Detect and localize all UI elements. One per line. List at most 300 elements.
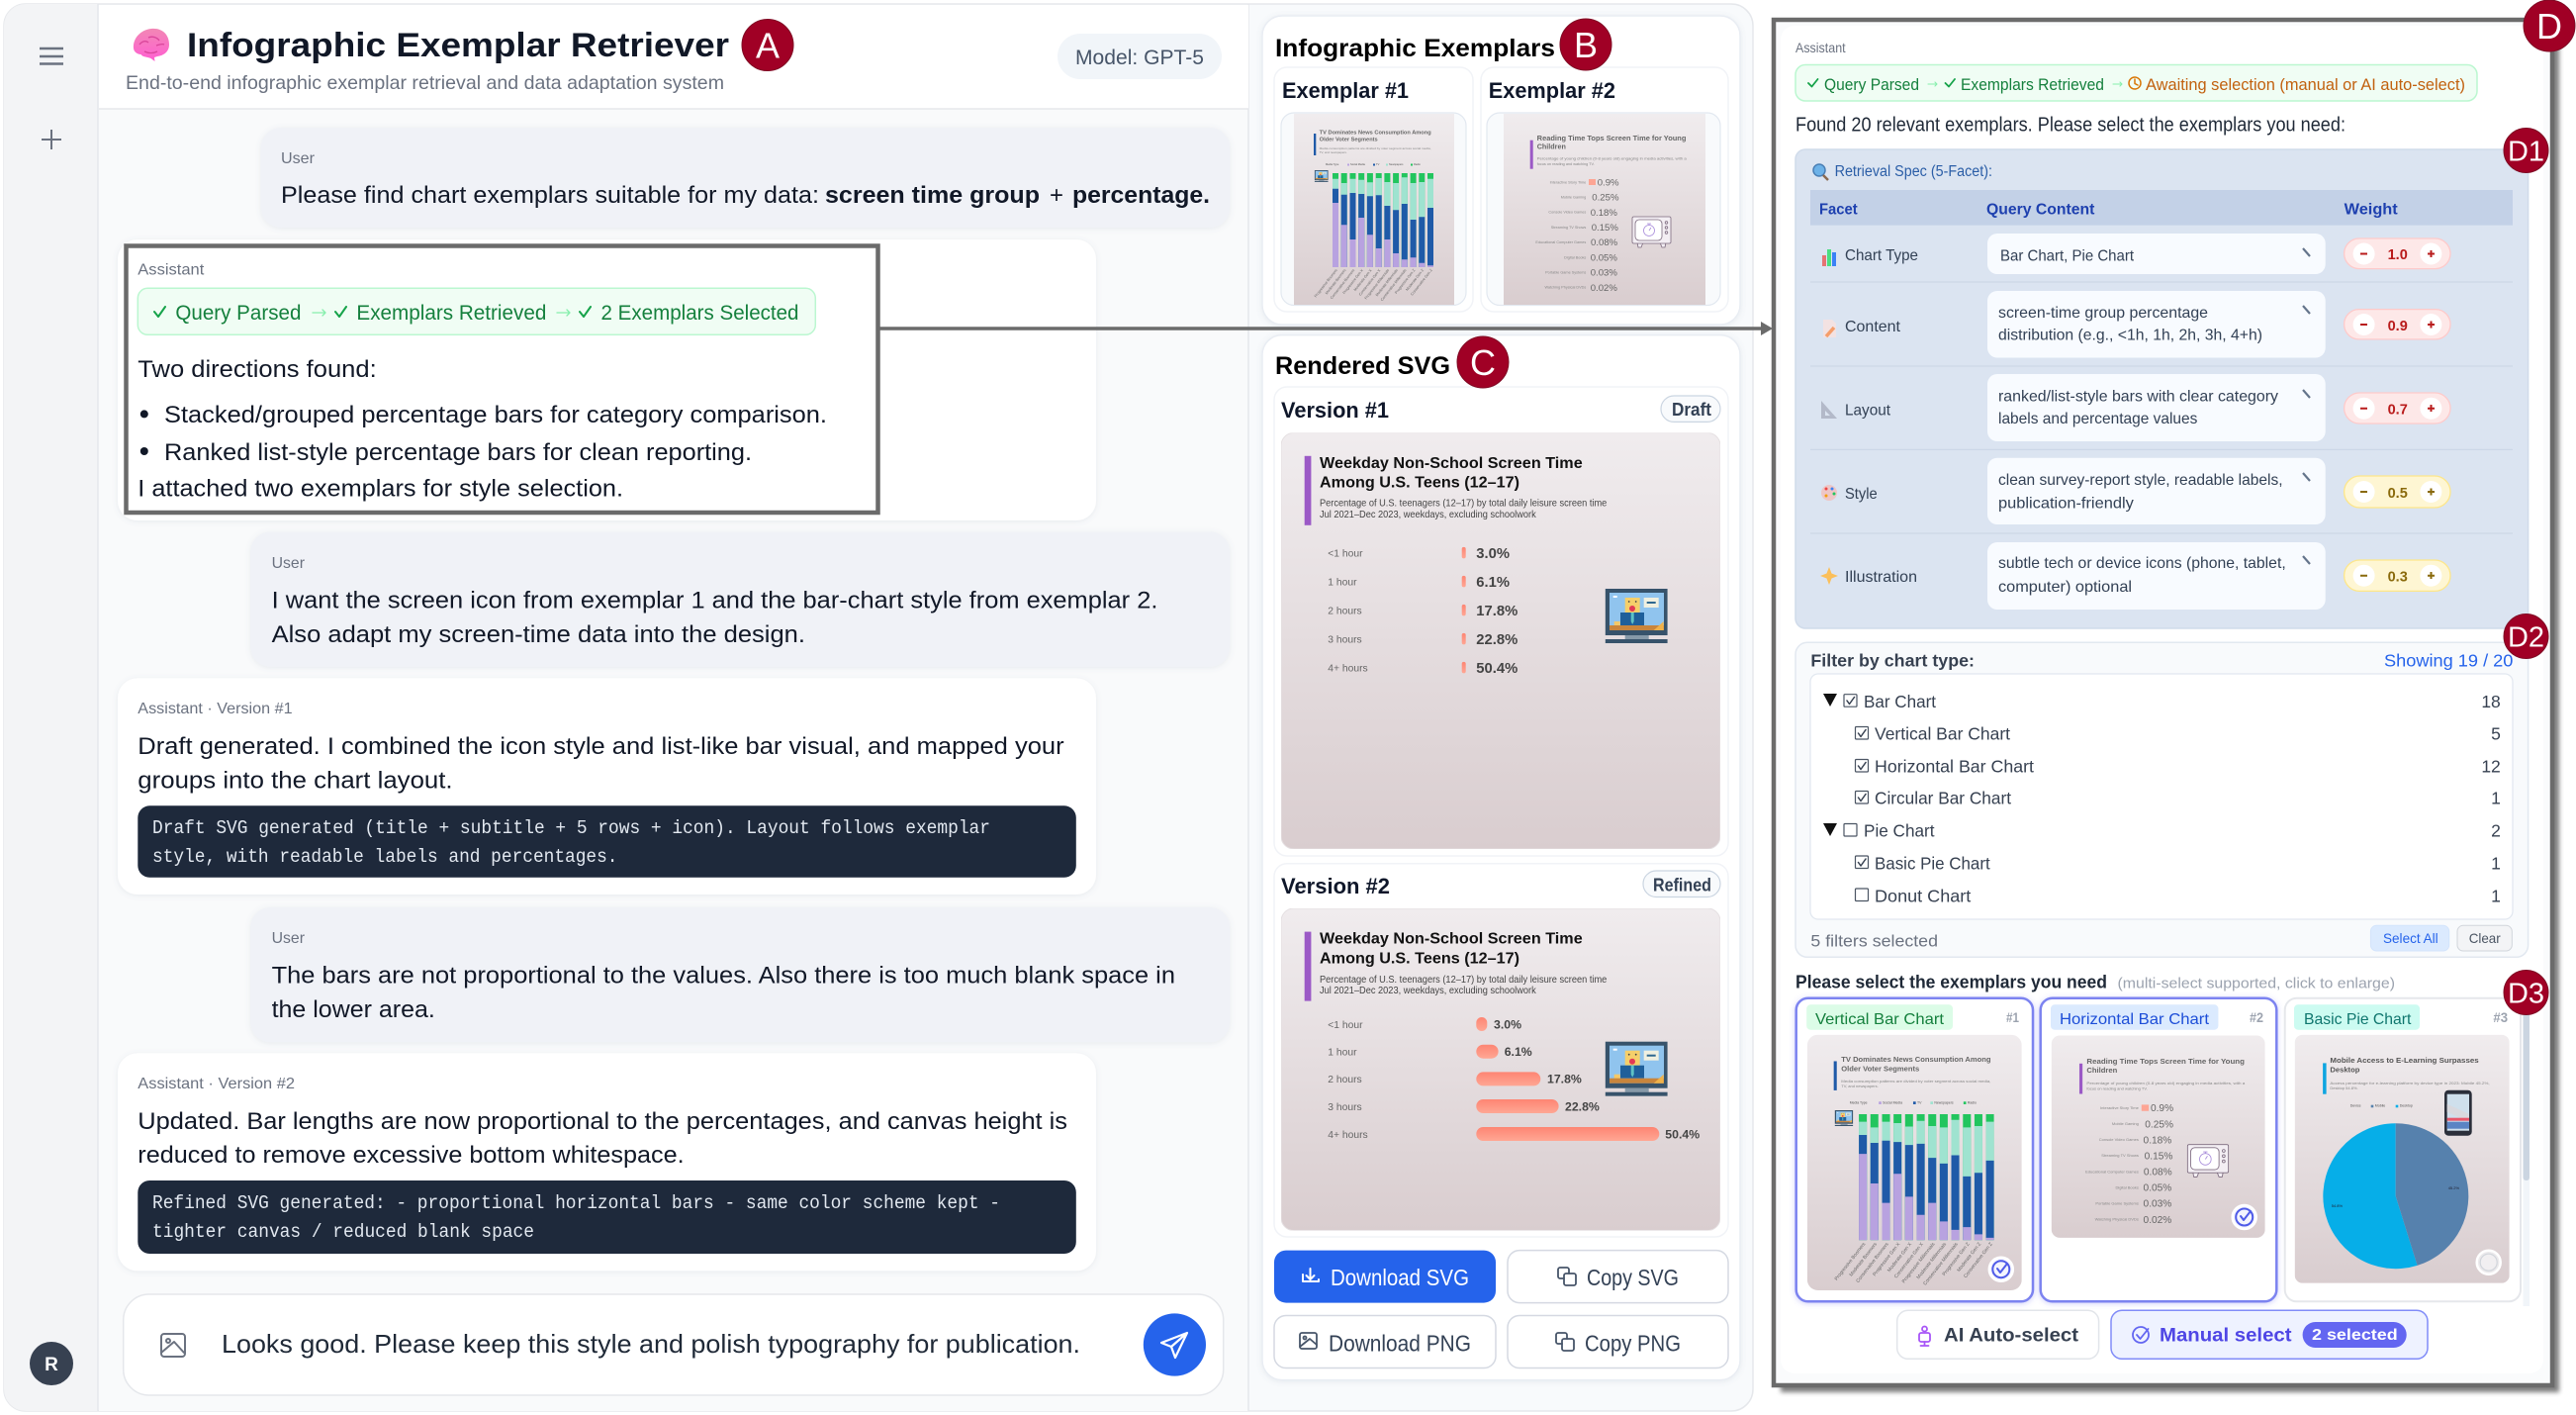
panel: D2 chart type filter — [1795, 642, 2529, 957]
thumbnail: TV news stacked chart: Moderate Millennials — [1916, 1241, 1948, 1280]
table header — [1810, 190, 2513, 226]
thumbnail: reading time list chart: Interactive Story Time — [1550, 180, 1586, 184]
thumbnail: reading time list chart: Mobile Gaming — [2112, 1121, 2139, 1126]
chart: refined SVG: 50.4% — [1665, 1127, 1700, 1141]
thumbnail: TV news stacked chart: Conservative Gen X — [1893, 1241, 1925, 1279]
filter tree: 5 — [2491, 724, 2501, 744]
thumbnail: pie chart: 45.2% — [2448, 1185, 2459, 1190]
filter tree: 18 — [2481, 692, 2501, 711]
thumbnail: reading time list chart: 0.05% — [1591, 252, 1617, 263]
row: illustration: 0.3 — [2388, 570, 2408, 586]
filter tree: 1 — [2491, 853, 2501, 873]
thumbnail: reading time list chart: 0.03% — [2144, 1199, 2171, 1210]
card: vertical bar chart — [1796, 998, 2033, 1301]
message: assistant version 1: Draft generated. I combined the icon style and list-like bar visual, and mapped your — [138, 733, 1064, 760]
thumbnail: reading time list chart: Reading Time Tops Screen Time for Young — [2086, 1057, 2245, 1066]
thumbnail: TV news stacked chart: Conservative Gen Z — [1410, 268, 1433, 296]
thumbnail: reading time list chart: 0.18% — [1591, 208, 1617, 219]
app shell background — [4, 4, 1753, 1411]
chart: refined SVG: 17.8% — [1547, 1073, 1582, 1086]
row: illustration: Illustration — [1845, 569, 1917, 586]
row: style: Style — [1845, 486, 1878, 503]
title: Infographic Exemplar Retriever — [187, 27, 729, 64]
chart: draft SVG: Jul 2021–Dec 2023, weekdays, excluding schoolwork — [1320, 510, 1536, 520]
thumbnail: TV news stacked chart: Progressive Gen Z — [1394, 268, 1417, 295]
badge: C: C — [1470, 342, 1496, 383]
thumbnail: TV news stacked chart: TV — [1376, 162, 1380, 166]
chart: refined SVG: 6.1% — [1505, 1045, 1532, 1059]
button: copy SVG — [1508, 1251, 1728, 1303]
thumbnail: TV news stacked chart: Progressive Gen X — [1872, 1241, 1902, 1277]
message: user 1: percentage. — [1072, 182, 1210, 209]
message: user 1: screen time group — [825, 182, 1040, 209]
thumbnail: pie chart: Device — [2350, 1104, 2361, 1108]
icon: selected check — [2233, 1205, 2256, 1229]
card: basic pie chart: Basic Pie Chart — [2304, 1011, 2412, 1028]
chart: refined SVG: 2 hours — [1328, 1075, 1362, 1085]
model pill — [1058, 34, 1222, 79]
thumbnail: reading time list chart: Reading Time Tops Screen Time for Young — [1537, 134, 1686, 142]
row: layout: labels and percentage values — [1998, 411, 2197, 427]
code block: Refined SVG generated: - proportional horizontal bars - same color scheme kept - — [152, 1192, 1000, 1214]
thumbnail: reading time list chart: Digital Books — [2115, 1184, 2139, 1189]
filter tree: 12 — [2481, 757, 2501, 777]
thumbnail: reading time list chart: Digital Books — [1564, 255, 1586, 259]
thumbnail: reading time list chart: Console Video Games — [1548, 211, 1586, 215]
filter tree: 1 — [2491, 887, 2501, 906]
thumbnail: TV news stacked chart: Moderate Boomers — [1848, 1241, 1879, 1277]
row: layout — [1821, 374, 2450, 441]
panel: D2 chart type filter: Filter by chart type: — [1810, 650, 1975, 670]
thumbnail: reading time list chart: 0.18% — [2144, 1135, 2171, 1146]
filter tree: 1 — [2491, 789, 2501, 808]
row: illustration — [1820, 542, 2450, 610]
badge: B — [1560, 19, 1611, 70]
row: content: distribution (e.g., <1h, 1h, 2h, 3h, 4+h) — [1998, 328, 2262, 344]
table header: Facet — [1819, 201, 1858, 218]
badge: D1 — [2504, 129, 2548, 172]
row: chart type: Bar Chart, Pie Chart — [2000, 247, 2135, 264]
heading: Rendered SVG — [1275, 352, 1450, 380]
message: assistant version 2: Assistant · Version #2 — [138, 1076, 295, 1092]
message: user 2: I want the screen icon from exemplar 1 and the bar-chart style from exemplar 2. — [272, 588, 1157, 614]
thumbnail: TV news stacked chart: Social Media — [1350, 162, 1365, 166]
icon: news monitor — [1606, 1042, 1668, 1096]
thumbnail: TV news stacked chart: Radio — [1414, 162, 1421, 166]
icon: phone — [2444, 1090, 2472, 1136]
badge: C — [1457, 336, 1509, 388]
card: horizontal bar chart: Horizontal Bar Chart — [2060, 1011, 2210, 1028]
model pill: Model: GPT-5 — [1075, 47, 1204, 69]
icon: hamburger menu — [40, 48, 63, 63]
chart: draft SVG: 50.4% — [1476, 661, 1518, 677]
thumbnail: reading time list chart: Percentage of young children (0-8 years old) engaging in media activities, with a — [1537, 157, 1688, 161]
chart: refined SVG: 1 hour — [1328, 1047, 1357, 1059]
thumbnail: TV news stacked chart: Media Type — [1850, 1100, 1868, 1104]
thumbnail: TV news stacked chart: Moderate Millennials — [1375, 268, 1399, 297]
thumbnail: reading time list chart: Children — [1537, 142, 1566, 150]
thumbnail: reading time list chart: 0.25% — [1592, 193, 1619, 204]
callout frame: assistant message A — [127, 245, 878, 513]
status pill: Exemplars Retrieved — [356, 302, 546, 325]
card: vertical bar chart: Vertical Bar Chart — [1815, 1011, 1945, 1028]
card: exemplar 1 — [1274, 67, 1473, 312]
thumbnail: TV news stacked chart: Conservative Millennials — [1380, 268, 1408, 302]
icon: news monitor — [1606, 589, 1668, 643]
thumbnail: TV news stacked chart: Social Media — [1883, 1100, 1902, 1104]
badge: D1: D1 — [2508, 137, 2544, 168]
code block — [138, 1180, 1076, 1254]
card: exemplar 2 — [1481, 67, 1728, 312]
card: horizontal bar chart — [2041, 998, 2276, 1301]
tag: draft: Draft — [1672, 400, 1711, 420]
button: select all — [2370, 925, 2449, 951]
message: user 1 — [261, 128, 1230, 228]
message: assistant version 1 — [118, 678, 1096, 895]
panel: D3 exemplar selection: (multi-select supported, click to enlarge) — [2117, 975, 2395, 991]
status pill: Awaiting selection (manual or AI auto-select) — [2146, 75, 2465, 94]
message: assistant 1 — [118, 239, 1096, 520]
chart: refined SVG: Among U.S. Teens (12–17) — [1320, 950, 1519, 967]
button: copy PNG: Copy PNG — [1585, 1330, 1681, 1356]
message: assistant version 2 — [118, 1053, 1096, 1271]
chart: refined SVG: 22.8% — [1565, 1099, 1600, 1113]
status pill: 2 Exemplars Selected — [601, 302, 799, 325]
chart: draft SVG: 4+ hours — [1328, 663, 1368, 674]
thumbnail: TV news stacked chart: Progressive Boomers — [1314, 268, 1338, 298]
thumbnail: TV news stacked chart: Progressive Gen Z — [1941, 1242, 1972, 1277]
panel: C rendered SVG — [1262, 335, 1740, 1380]
thumbnail: TV news stacked chart: Newspapers — [1934, 1100, 1954, 1104]
badge: B: B — [1574, 25, 1598, 65]
thumbnail: TV news stacked chart: Moderate Gen X — [1353, 268, 1373, 292]
thumbnail: TV news stacked chart: TV Dominates News Consumption Among — [1320, 131, 1431, 137]
chart: draft SVG: <1 hour — [1328, 548, 1363, 559]
panel: B infographic exemplars — [1262, 16, 1740, 325]
message: user 3 — [251, 907, 1230, 1042]
message: assistant version 2: Updated. Bar lengths are now proportional to the percentages, and canvas height is — [138, 1108, 1067, 1135]
scrollbar — [2523, 997, 2530, 1306]
badge: D — [2524, 0, 2575, 51]
thumbnail: reading time list chart: Console Video Games — [2099, 1137, 2139, 1142]
row: layout: 0.7 — [2388, 402, 2408, 418]
card: version 2: Version #2 — [1281, 874, 1390, 898]
thumbnail: TV news stacked chart: Conservative Gen Z — [1963, 1242, 1994, 1279]
panel: D1 retrieval spec — [1795, 149, 2529, 628]
thumbnail: TV news stacked chart: Conservative Boomers — [1330, 268, 1355, 300]
thumbnail: TV news stacked chart — [1807, 1035, 2022, 1290]
panel: D1 retrieval spec: Retrieval Spec (5-Facet): — [1835, 163, 1992, 180]
thumbnail: TV news stacked chart: TV, and newspapers. — [1841, 1084, 1879, 1088]
icon: plus — [42, 130, 61, 149]
filter tree: Bar Chart — [1864, 692, 1936, 711]
message: assistant version 1: groups into the chart layout. — [138, 767, 453, 794]
thumbnail: reading time list chart: focus on reading and watching TV. — [1537, 162, 1595, 166]
code block — [138, 805, 1076, 878]
thumbnail: reading time list chart: 0.08% — [1591, 237, 1618, 248]
filter tree — [1810, 674, 2513, 919]
thumbnail: TV news stacked chart: Conservative Boomers — [1855, 1241, 1890, 1284]
thumbnail: TV news stacked chart: Newspapers — [1389, 162, 1404, 166]
thumbnail: TV news stacked chart: Older Voter Segments — [1841, 1066, 1919, 1074]
thumbnail: reading time list chart: Percentage of young children (0-8 years old) engaging in media activities, with a — [2086, 1081, 2246, 1085]
code block: tighter canvas / reduced blank space — [152, 1221, 534, 1243]
panel: D selection message frame — [1774, 20, 2559, 1392]
thumbnail: TV news stacked chart: Conservative Gen X — [1358, 268, 1382, 297]
filter tree: Pie Chart — [1864, 821, 1935, 841]
thumbnail: pie chart: 54.8% — [2332, 1203, 2343, 1208]
status pill — [138, 288, 815, 334]
panel: D selection message frame: Assistant — [1795, 40, 1846, 55]
header — [99, 5, 1248, 109]
prompt text: Found 20 relevant exemplars. Please select the exemplars you need: — [1795, 115, 2346, 137]
filter tree: 2 — [2491, 821, 2501, 841]
row: content — [1823, 291, 2450, 358]
thumbnail: TV news stacked chart: Moderate Gen Z — [1956, 1242, 1982, 1274]
thumbnail: TV news stacked chart: Progressive Millennials — [1901, 1241, 1937, 1284]
chart: draft SVG: 3.0% — [1476, 546, 1510, 562]
chart: draft SVG: 3 hours — [1328, 634, 1362, 645]
subtitle: End-to-end infographic exemplar retrieval and data adaptation system — [126, 72, 724, 94]
badge: A — [742, 20, 793, 71]
thumbnail: reading time list chart: Streaming TV Shows — [2101, 1153, 2139, 1158]
thumbnail: reading time list chart: 0.9% — [2151, 1103, 2173, 1114]
thumbnail: TV news stacked chart: TV, and newspapers. — [1320, 150, 1347, 154]
row: style: publication-friendly — [1998, 495, 2134, 512]
badge: D3 — [2504, 970, 2548, 1015]
chart: draft SVG: 1 hour — [1328, 577, 1357, 588]
chart: refined SVG: Weekday Non-School Screen Time — [1320, 931, 1583, 948]
thumbnail: reading time list chart: Children — [2086, 1066, 2118, 1075]
status pill: Query Parsed — [1824, 75, 1919, 94]
thumbnail: reading time list chart: Streaming TV Shows — [1551, 226, 1586, 230]
panel: D3 exemplar selection: Please select the exemplars you need — [1795, 972, 2107, 991]
thumbnail: TV news stacked chart: Progressive Gen X — [1342, 268, 1364, 295]
thumbnail: reading time list chart: Educational Computer Games — [1535, 240, 1586, 244]
filter tree: Basic Pie Chart — [1875, 853, 1990, 873]
filter tree: Horizontal Bar Chart — [1875, 757, 2034, 777]
row: illustration: computer) optional — [1998, 579, 2132, 596]
panel: D3 exemplar selection — [1795, 972, 2530, 1359]
icon: brain — [134, 29, 169, 61]
count pill — [2303, 1322, 2407, 1348]
chart: refined SVG — [1281, 908, 1720, 1231]
icon: unselected circle — [2477, 1251, 2501, 1274]
thumbnail: TV news stacked chart: Conservative Millennials — [1922, 1241, 1960, 1286]
icon: send button — [1144, 1313, 1206, 1376]
arrow: message to panel D — [879, 322, 1773, 335]
card: version 2 — [1274, 864, 1728, 1237]
chart: draft SVG: 17.8% — [1476, 604, 1518, 619]
row: illustration: subtle tech or device icons (phone, tablet, — [1998, 555, 2286, 572]
button: AI auto-select: AI Auto-select — [1944, 1325, 2079, 1347]
button: manual select: Manual select — [2160, 1325, 2292, 1347]
tag: draft — [1661, 396, 1720, 422]
chart: draft SVG: 2 hours — [1328, 606, 1362, 616]
message: assistant version 1: Assistant · Version #1 — [138, 701, 293, 717]
thumbnail: reading time list chart: Mobile Gaming — [1561, 196, 1586, 200]
card: basic pie chart — [2285, 998, 2521, 1301]
thumbnail: reading time list chart: 0.05% — [2144, 1183, 2171, 1194]
status pill — [1795, 65, 2477, 101]
row: chart type: 1.0 — [2388, 247, 2408, 263]
status pill: Exemplars Retrieved — [1961, 75, 2104, 94]
button: AI auto-select — [1897, 1310, 2099, 1359]
message: user 3: the lower area. — [272, 996, 435, 1023]
thumbnail: reading time list chart: focus on reading and watching TV. — [2086, 1086, 2148, 1091]
thumbnail: TV news stacked chart: Media consumption patterns are divided by voter segment across social media, — [1320, 146, 1431, 150]
message: assistant 1: Assistant — [138, 261, 205, 279]
badge: D: D — [2536, 6, 2562, 47]
thumbnail: reading time list chart: 0.15% — [1592, 223, 1618, 234]
tag: refined — [1643, 871, 1720, 896]
chart: refined SVG: Percentage of U.S. teenagers (12–17) by total daily leisure screen time — [1320, 975, 1607, 986]
filter tree: Circular Bar Chart — [1875, 789, 2011, 808]
thumbnail: pie chart: Mobile Access to E-Learning Surpasses — [2330, 1056, 2479, 1065]
row: chart type: Chart Type — [1845, 247, 1918, 264]
row: content: 0.9 — [2388, 319, 2408, 334]
count pill: 2 selected — [2312, 1327, 2398, 1344]
badge: D2: D2 — [2508, 621, 2544, 653]
message: user 1: Please find chart exemplars suitable for my data: — [281, 182, 819, 209]
thumbnail: reading time list chart: 0.08% — [2144, 1168, 2172, 1179]
thumbnail: TV news stacked chart — [1294, 114, 1454, 305]
thumbnail: pie chart: Mobile — [2375, 1104, 2385, 1108]
filter tree: Donut Chart — [1875, 887, 1971, 906]
status pill: Query Parsed — [175, 302, 301, 325]
thumbnail: pie chart: Desktop — [2400, 1104, 2413, 1108]
thumbnail: reading time list chart: Interactive Story Time — [2100, 1105, 2140, 1110]
thumbnail: pie chart: Desktop 54.8%. — [2330, 1085, 2358, 1090]
message: user 3: User — [272, 930, 306, 947]
button: select all: Select All — [2383, 930, 2438, 946]
chart: draft SVG — [1281, 432, 1720, 849]
chart: refined SVG: <1 hour — [1328, 1020, 1363, 1031]
thumbnail: reading time list chart: Portable Game Systems — [1545, 271, 1586, 275]
card: exemplar 1: Exemplar #1 — [1282, 78, 1409, 103]
badge: A: A — [756, 26, 780, 65]
avatar: R — [45, 1355, 58, 1375]
button: copy SVG: Copy SVG — [1587, 1265, 1679, 1290]
panel: D2 chart type filter: 5 filters selected — [1810, 932, 1938, 951]
thumbnail: TV news stacked chart: Media Type — [1326, 162, 1339, 166]
table header: Weight — [2345, 201, 2398, 218]
thumbnail: reading time list chart: 0.02% — [1591, 283, 1617, 294]
thumbnail: TV news stacked chart: Older Voter Segments — [1320, 137, 1378, 142]
table header: Query Content — [1986, 201, 2094, 218]
message: assistant 1: Two directions found: — [138, 356, 377, 383]
badge: D2 — [2504, 613, 2548, 659]
icon: image attach — [161, 1334, 185, 1357]
thumbnail: TV news stacked chart: Progressive Boomers — [1834, 1241, 1868, 1282]
thumbnail: pie chart: Access percentage for e-learning platform by device type in 2023: Mobile 45.2%, — [2330, 1081, 2490, 1085]
code block: style, with readable labels and percentages. — [152, 846, 617, 868]
card: horizontal bar chart: #2 — [2250, 1009, 2263, 1025]
filter tree: Vertical Bar Chart — [1875, 724, 2010, 744]
thumbnail: reading time list chart: 0.9% — [1598, 177, 1619, 188]
thumbnail: TV news stacked chart: TV Dominates News Consumption Among — [1841, 1056, 1991, 1064]
thumbnail: reading time list chart: Watching Physical DVDs — [1544, 286, 1586, 290]
message: assistant 1: Ranked list-style percentage bars for clean reporting. — [164, 439, 752, 466]
thumbnail: reading time list chart: Watching Physical DVDs — [2095, 1217, 2139, 1222]
card: exemplar 2: Exemplar #2 — [1489, 78, 1615, 103]
chart: refined SVG: 3 hours — [1328, 1102, 1362, 1113]
thumbnail: TV news stacked chart: TV — [1917, 1100, 1922, 1104]
icon: selected check — [1989, 1258, 2013, 1281]
card: basic pie chart: #3 — [2493, 1009, 2508, 1025]
button: download SVG: Download SVG — [1331, 1265, 1469, 1290]
button: download SVG — [1274, 1251, 1496, 1303]
panel: left sidebar — [4, 4, 98, 1411]
button: clear: Clear — [2469, 930, 2501, 946]
message: assistant 1: I attached two exemplars for style selection. — [138, 476, 623, 503]
thumbnail: TV news stacked chart: Moderate Boomers — [1325, 268, 1347, 295]
message: user 2: Also adapt my screen-time data into the design. — [272, 621, 805, 648]
thumbnail: reading time list chart — [1504, 114, 1705, 305]
message: assistant version 2: reduced to remove excessive bottom whitespace. — [138, 1142, 685, 1169]
thumbnail: reading time list chart: Educational Computer Games — [2085, 1169, 2139, 1174]
card: vertical bar chart: #1 — [2006, 1009, 2019, 1025]
thumbnail: reading time list chart: 0.02% — [2144, 1215, 2171, 1226]
button: copy PNG — [1508, 1316, 1728, 1368]
icon: magnifier — [1813, 164, 1828, 180]
thumbnail: reading time list chart: Portable Game Systems — [2095, 1201, 2139, 1206]
chart: refined SVG: Jul 2021–Dec 2023, weekdays, excluding schoolwork — [1320, 986, 1536, 996]
button: download PNG — [1274, 1316, 1496, 1368]
chart: refined SVG: 4+ hours — [1328, 1130, 1368, 1141]
message: user 1: + — [1050, 182, 1063, 209]
thumbnail: reading time list chart: 0.25% — [2145, 1119, 2173, 1130]
thumbnail: reading time list chart: 0.15% — [2145, 1151, 2172, 1162]
message: user 1: User — [281, 150, 316, 167]
chat input — [124, 1294, 1224, 1395]
thumbnail: TV news stacked chart: Progressive Millennials — [1364, 268, 1390, 300]
button: manual select — [2111, 1310, 2428, 1359]
message: assistant 1: Stacked/grouped percentage bars for category comparison. — [164, 402, 827, 428]
chart: draft SVG: 6.1% — [1476, 575, 1510, 591]
avatar — [30, 1342, 73, 1385]
card: version 1 — [1274, 387, 1728, 856]
tag: refined: Refined — [1653, 876, 1711, 896]
row: style: 0.5 — [2388, 486, 2408, 502]
badge: D3: D3 — [2508, 978, 2544, 1009]
button: download PNG: Download PNG — [1329, 1330, 1471, 1356]
row: layout: ranked/list-style bars with clear category — [1998, 388, 2278, 406]
row: style — [1821, 458, 2450, 524]
panel: D2 chart type filter: Showing 19 / 20 — [2384, 650, 2514, 670]
thumbnail: TV news stacked chart: Radio — [1968, 1100, 1977, 1104]
card: version 1: Version #1 — [1281, 398, 1389, 423]
chart: draft SVG: Weekday Non-School Screen Time — [1320, 455, 1583, 472]
thumbnail: reading time list chart: 0.03% — [1591, 268, 1617, 279]
chart: draft SVG: Percentage of U.S. teenagers (12–17) by total daily leisure screen time — [1320, 498, 1607, 509]
chart: refined SVG: 3.0% — [1494, 1017, 1521, 1031]
chart: draft SVG: 22.8% — [1476, 632, 1518, 648]
button: clear — [2457, 925, 2512, 951]
heading: Infographic Exemplars — [1275, 35, 1555, 62]
row: style: clean survey-report style, readable labels, — [1998, 472, 2283, 489]
panel: A chat column — [99, 4, 1248, 1411]
thumbnail: pie chart — [2295, 1035, 2509, 1283]
thumbnail: TV news stacked chart: Media consumption patterns are divided by voter segment across social media, — [1841, 1079, 1991, 1084]
thumbnail: TV news stacked chart: Moderate Gen Z — [1405, 268, 1426, 292]
message: user 2 — [251, 531, 1230, 667]
code block: Draft SVG generated (title + subtitle + 5 rows + icon). Layout follows exemplar — [152, 817, 990, 839]
row: content: screen-time group percentage — [1998, 305, 2208, 322]
row: content: Content — [1845, 319, 1901, 335]
chat input: Looks good. Please keep this style and polish typography for publication. — [222, 1329, 1080, 1359]
row: layout: Layout — [1845, 403, 1891, 420]
